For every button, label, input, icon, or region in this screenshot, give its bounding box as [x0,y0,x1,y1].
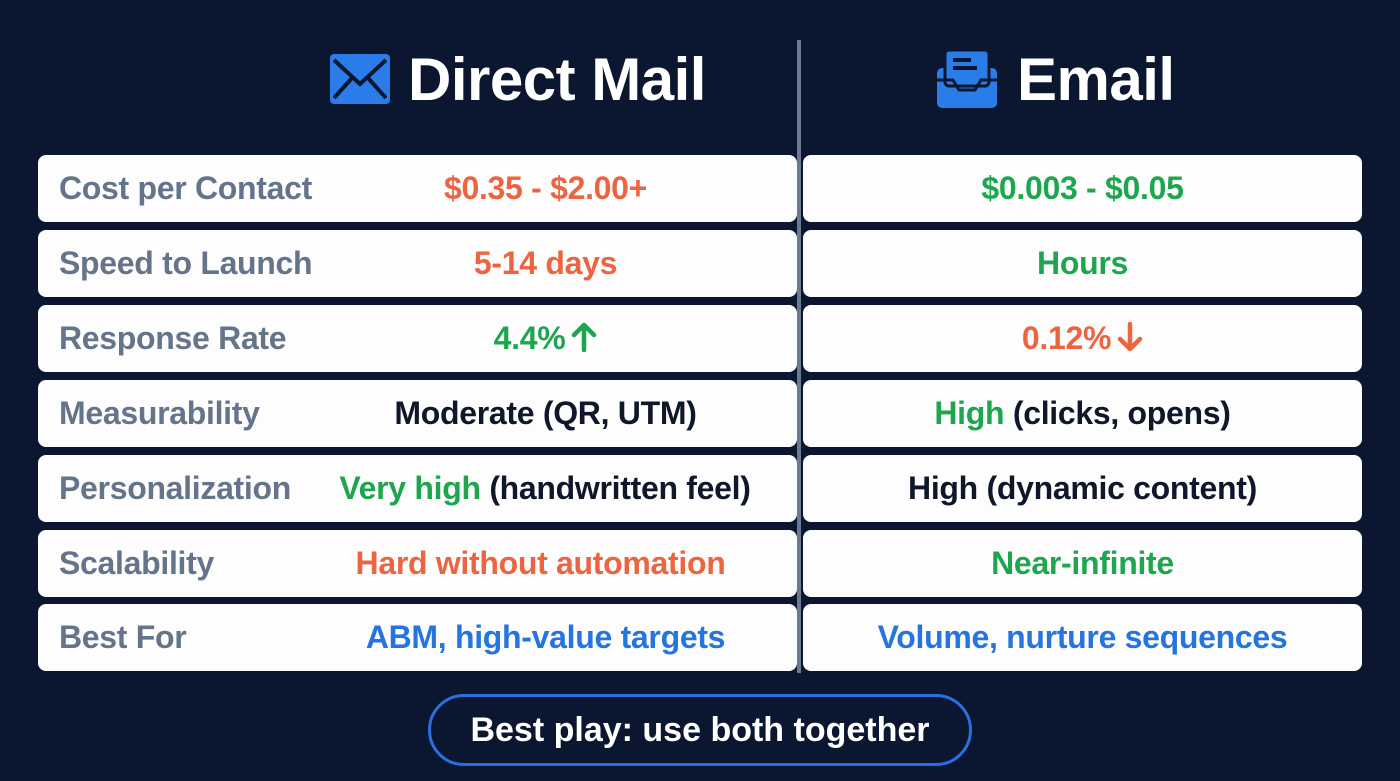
row: cost: $0.35 - $2.00+ [444,170,647,206]
row: measurability: High (clicks, opens) [934,395,1231,431]
row: response: 4.4% [494,320,565,356]
row: personalization: Very high (handwritten feel) [339,470,751,506]
heading: email [937,46,1175,113]
heading: direct mail [330,46,706,113]
icon: inbox [937,52,997,108]
callout: best play: Best play: use both together [470,711,930,749]
icon: envelope [330,54,390,104]
row: speed: Speed to Launch [59,245,312,281]
row: best for: Best For [59,619,186,655]
row: personalization [38,455,1362,522]
row: speed: 5-14 days [474,245,617,281]
row: measurability: Measurability [59,395,260,431]
row: best for [38,604,1362,671]
title text: Direct Mail [408,46,706,113]
row: best for: Volume, nurture sequences [878,619,1287,655]
row: scalability: Near-infinite [991,545,1174,581]
row: scalability [38,530,1362,597]
row: speed [38,230,1362,297]
row: speed: Hours [1037,245,1128,281]
row: personalization: High (dynamic content) [908,470,1257,506]
row: response: 0.12% [1022,320,1111,356]
divider [797,40,801,673]
row: best for: ABM, high-value targets [366,619,725,655]
row: personalization: Personalization [59,470,291,506]
callout: best play [428,694,972,766]
row: scalability: Scalability [59,545,214,581]
row: scalability: Hard without automation [356,545,725,581]
row: measurability: Moderate (QR, UTM) [394,395,697,431]
row: cost: $0.003 - $0.05 [981,170,1184,206]
row: response: Response Rate [59,320,286,356]
row: measurability [38,380,1362,447]
row: response [38,305,1362,372]
row: cost [38,155,1362,222]
title text: Email [1017,46,1175,113]
row: cost: Cost per Contact [59,170,312,206]
